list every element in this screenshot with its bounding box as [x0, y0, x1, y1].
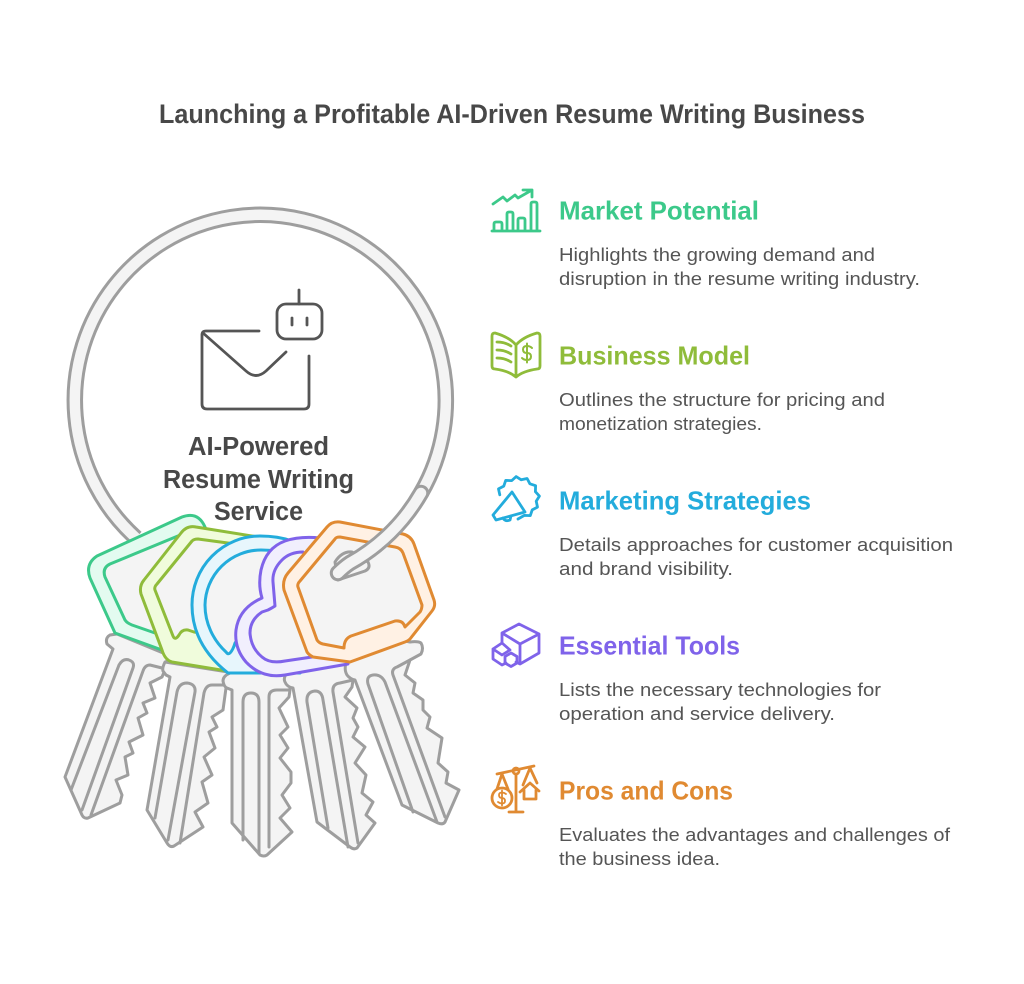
key head: lime — [140, 527, 290, 671]
key head: blue — [192, 536, 300, 673]
title: Launching a Profitable AI-Driven Resume Writing Business — [159, 99, 865, 129]
central label — [163, 433, 354, 526]
heading and text: Marketing Strategies: and brand visibility. — [559, 558, 733, 579]
heading and text: Market Potential — [559, 196, 920, 289]
heading and text: Marketing Strategies: Details approaches for customer acquisition — [559, 534, 953, 555]
key head: orange — [284, 522, 435, 662]
key ring: main loop — [75, 215, 446, 538]
heading and text: Market Potential: disruption in the resume writing industry. — [559, 268, 920, 289]
icon: balance scale — [492, 766, 539, 812]
icon: boxes — [493, 624, 539, 666]
heading and text: Pros and Cons: the business idea. — [559, 848, 720, 869]
key head: purple heart — [236, 537, 360, 676]
key blade 1 — [65, 634, 168, 818]
key blade 2 — [147, 662, 228, 847]
central label: Service — [214, 498, 303, 526]
central label: AI-Powered — [188, 433, 329, 461]
heading and text: Business Model — [559, 340, 885, 434]
heading and text: Market Potential: Highlights the growing demand and — [559, 244, 875, 265]
heading and text: Business Model: Outlines the structure for pricing and — [559, 389, 885, 410]
heading and text: Marketing Strategies — [559, 486, 953, 579]
heading and text: Pros and Cons: Pros and Cons — [559, 776, 733, 806]
heading and text: Business Model: monetization strategies. — [559, 413, 762, 434]
central label: Resume Writing — [163, 466, 354, 494]
heading and text: Business Model: Business Model — [559, 340, 750, 370]
icon: envelope with robot — [202, 290, 322, 409]
heading and text: Pros and Cons — [559, 776, 951, 869]
icon: book with dollar — [492, 333, 540, 377]
key ring: hook end — [335, 493, 421, 580]
heading and text: Pros and Cons: Evaluates the advantages and challenges of — [559, 824, 951, 845]
key blade 3 — [223, 672, 292, 856]
heading and text: Essential Tools: operation and service delivery. — [559, 703, 835, 724]
key blade 4 — [284, 662, 375, 849]
heading and text: Marketing Strategies: Marketing Strategies — [559, 486, 811, 516]
heading and text: Essential Tools: Lists the necessary technologies for — [559, 679, 881, 700]
key blade 5 — [345, 640, 459, 824]
icon: market growth chart — [492, 190, 540, 231]
icon: megaphone in badge — [493, 477, 539, 521]
key blades — [65, 634, 459, 856]
heading and text: Essential Tools — [559, 630, 881, 724]
heading and text: Market Potential: Market Potential — [559, 196, 759, 226]
heading and text: Essential Tools: Essential Tools — [559, 630, 740, 660]
key head: green — [89, 515, 230, 650]
